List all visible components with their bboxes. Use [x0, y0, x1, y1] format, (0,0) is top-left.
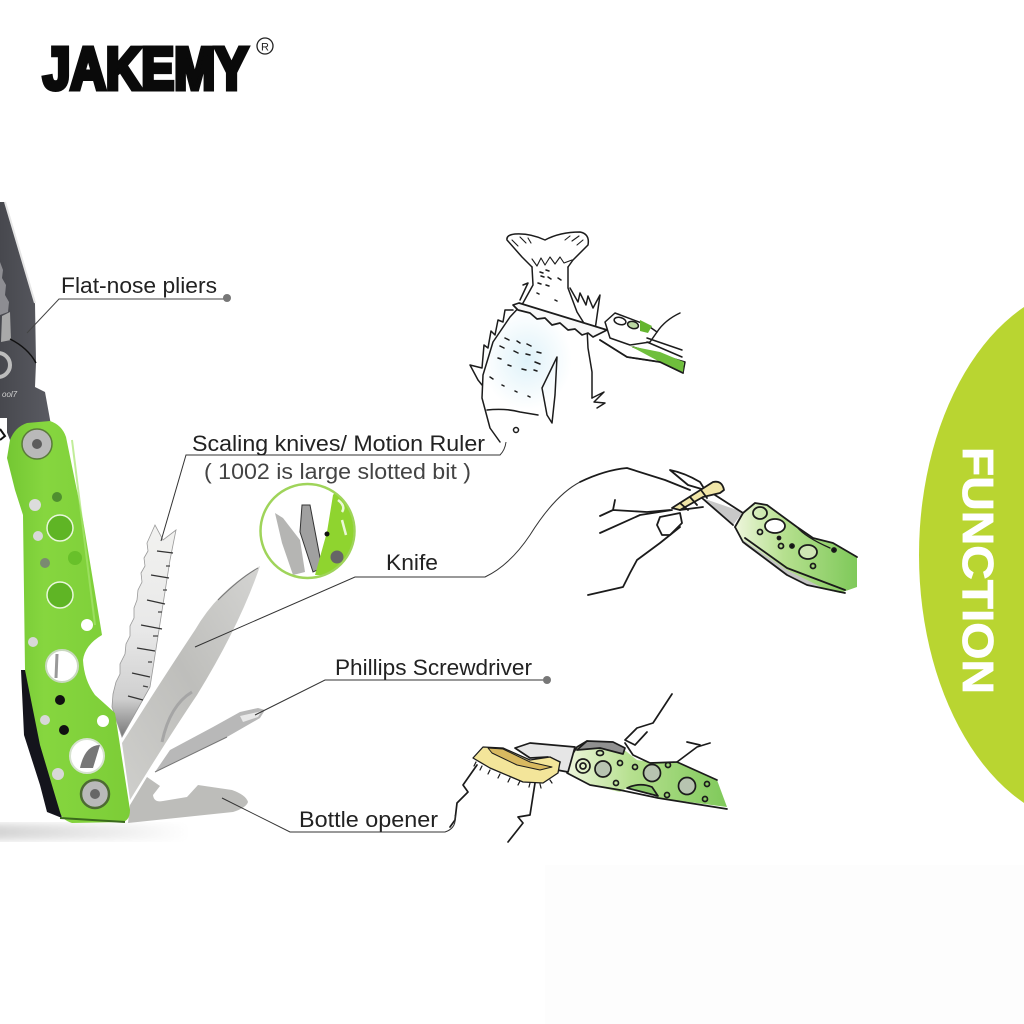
multitool product photo: [0, 202, 265, 840]
serrated blade across fish: [513, 303, 607, 337]
bottle opener: [128, 777, 248, 823]
label: Phillips Screwdriver: Phillips Screwdriver: [335, 655, 532, 680]
blade: [702, 498, 743, 525]
pliers: [0, 202, 51, 445]
logo: JAKEMY: R: [261, 42, 269, 54]
hands: [450, 765, 477, 827]
label: Knife: Knife: [386, 550, 438, 575]
label dots: [223, 294, 551, 684]
ground shadow: [0, 824, 190, 840]
logo: JAKEMY: JAKEMY: [43, 36, 248, 102]
hand: [580, 468, 690, 490]
stick: [672, 482, 724, 510]
label: Scaling knives / Motion Ruler: Scaling knives/ Motion Ruler: [192, 431, 485, 456]
pliers: ool7: [2, 390, 18, 399]
illustration: knife cutting stick: [580, 468, 857, 595]
tool body: [605, 313, 657, 345]
black rear handle: [21, 670, 62, 818]
handle screws: [22, 429, 52, 459]
knife blade: [122, 566, 260, 800]
label: slotted bit note: ( 1002 is large slotted bit ): [204, 459, 471, 484]
illustration: scaling a fish: [470, 232, 685, 442]
ruler and scaling blade: [112, 525, 176, 737]
panel: FUNCTION lime semicircle: [919, 284, 1024, 826]
illustration: opening a bottle cap: [450, 694, 727, 842]
green body: [735, 503, 857, 593]
leader lines: [27, 299, 580, 832]
green handle: [7, 421, 130, 823]
opener tip: [515, 743, 575, 772]
phillips screwdriver: [155, 708, 265, 772]
handle holes: [52, 492, 62, 502]
label: Flat-nose pliers: Flat-nose pliers: [61, 273, 217, 298]
inset circle: slotted bit detail: [260, 480, 360, 578]
bottle cap: [473, 747, 560, 783]
label: Bottle opener: Bottle opener: [299, 807, 438, 832]
heading: FUNCTION: FUNCTION: [953, 447, 1002, 694]
